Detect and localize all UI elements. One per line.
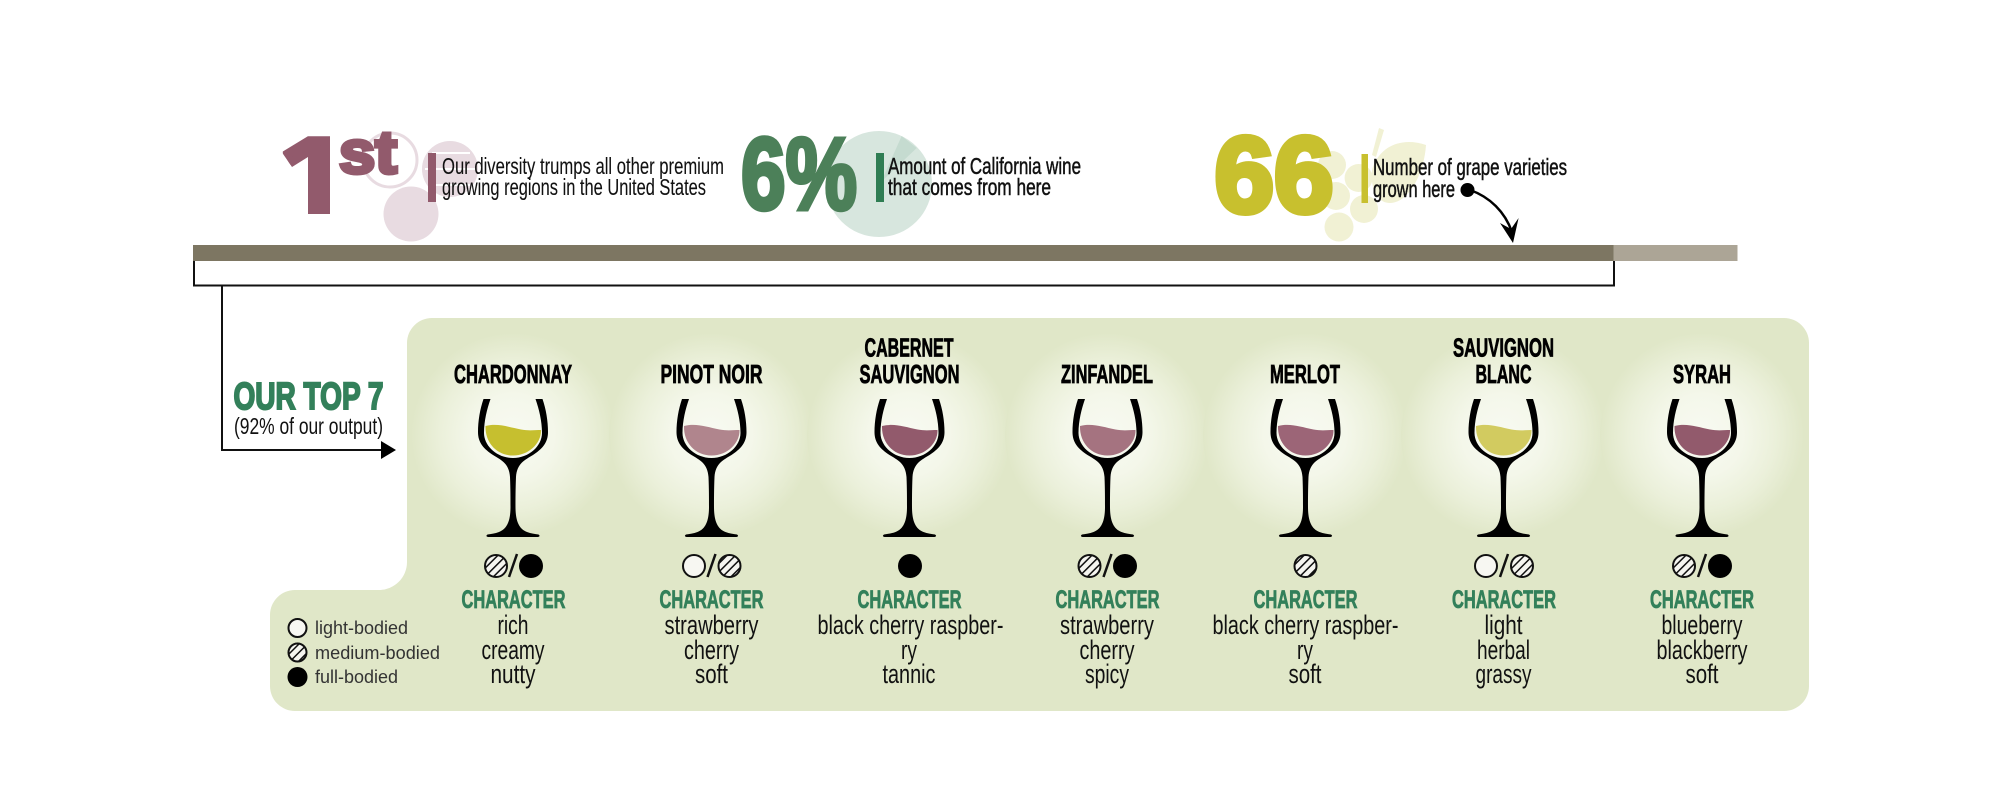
character list: CHARACTER (1650, 586, 1754, 614)
name (860, 332, 960, 389)
text: diversity: growing regions in the United States (442, 174, 706, 200)
character list: blueberry (1662, 610, 1743, 640)
text: grape varieties: Number of grape varieties (1373, 154, 1567, 180)
stat: 6% of California wine (741, 117, 1081, 237)
character list: blackberry (1656, 635, 1748, 665)
character list: black cherry raspber- (1212, 610, 1398, 640)
icon: pie chart (826, 131, 932, 237)
character list (1452, 586, 1556, 689)
name: MERLOT (1270, 359, 1340, 389)
stacked bar (193, 245, 1738, 261)
character list: nutty (490, 659, 536, 689)
character list (660, 586, 764, 689)
character list: CHARACTER (1452, 586, 1556, 614)
character list: tannic (882, 659, 936, 689)
character list: cherry (684, 635, 739, 665)
column: Chardonnay (454, 359, 572, 689)
name: SAUVIGNON (1453, 332, 1554, 362)
icon: wine glass (1270, 399, 1340, 537)
panel: top 7 varietals (270, 318, 1809, 711)
name: CABERNET (864, 332, 954, 362)
text: grape varieties: grown here (1373, 176, 1455, 202)
character list: CHARACTER (660, 586, 764, 614)
name: CHARDONNAY (454, 359, 572, 389)
body icons (1475, 554, 1533, 577)
column: Syrah (1650, 359, 1754, 689)
accent bar (1362, 154, 1368, 203)
name (1453, 332, 1554, 389)
character list: grassy (1476, 659, 1532, 689)
character list: CHARACTER (1056, 586, 1160, 614)
accent bar (428, 153, 436, 202)
heading: our top 7: (92% of our output) (234, 413, 383, 439)
character list (1650, 586, 1754, 689)
column: Cabernet Sauvignon (818, 332, 1004, 689)
column: Sauvignon Blanc (1452, 332, 1556, 689)
icon: grape cluster (1318, 128, 1426, 242)
name: ZINFANDEL (1061, 359, 1153, 389)
body icons (1673, 554, 1732, 578)
name: BLANC (1476, 359, 1532, 389)
text: grape varieties (1373, 154, 1567, 202)
character list (1212, 586, 1398, 689)
character list (462, 586, 566, 689)
character list: rich (498, 610, 528, 640)
body icon (898, 554, 922, 578)
character list: CHARACTER (462, 586, 566, 614)
number: 66: 66 (1214, 114, 1334, 235)
icon: wine glass (1667, 399, 1737, 537)
arrow: to bar (1460, 183, 1519, 243)
character list: CHARACTER (858, 586, 962, 614)
bracket and arrow to top 7 (194, 261, 1614, 459)
icon: wine glass (478, 399, 548, 537)
icon: wine glass (1468, 399, 1538, 537)
character list (1056, 586, 1160, 689)
body icons (683, 554, 740, 577)
heading: our top 7: OUR TOP 7 (234, 376, 384, 418)
text: diversity (442, 153, 724, 200)
character list: soft (695, 659, 728, 689)
character list: spicy (1085, 659, 1129, 689)
character list: strawberry (1060, 610, 1154, 640)
icon: pale circles (363, 133, 478, 242)
character list: creamy (482, 635, 545, 665)
character list (818, 586, 1004, 689)
column: Zinfandel (1056, 359, 1160, 689)
accent bar (876, 153, 884, 202)
name: SAUVIGNON (860, 359, 960, 389)
number: 1st: 1 (279, 116, 349, 248)
heading: our top 7 (234, 376, 384, 439)
legend: full-bodied (315, 667, 398, 687)
text: California: that comes from here (888, 174, 1051, 200)
name: PINOT NOIR (660, 359, 763, 389)
icon: wine glass (874, 399, 944, 537)
number: 1st: st (339, 119, 397, 186)
character list: soft (1686, 659, 1719, 689)
body icon (1294, 555, 1316, 577)
number: 1st (282, 132, 398, 214)
character list: herbal (1477, 635, 1530, 665)
column: Merlot (1212, 359, 1398, 689)
text: diversity: Our diversity trumps all other premium (442, 153, 724, 179)
character list: ry (1297, 635, 1313, 665)
character list: cherry (1080, 635, 1135, 665)
character list: light (1484, 610, 1523, 640)
stat: 1st growing region (282, 132, 723, 242)
column: Pinot Noir (660, 359, 764, 689)
legend: medium-bodied (315, 643, 440, 663)
body icons (485, 554, 543, 578)
icon: wine glass (676, 399, 746, 537)
body icons (1078, 554, 1137, 578)
text: California: Amount of California wine (888, 153, 1081, 179)
character list: CHARACTER (1254, 586, 1358, 614)
legend: light-bodied (315, 618, 408, 638)
glows behind glasses (411, 333, 1804, 537)
legend (288, 618, 440, 687)
name: SYRAH (1673, 359, 1731, 389)
character list: strawberry (664, 610, 759, 640)
icon: wine glass (1072, 399, 1142, 537)
stat: 66 grape varieties (1214, 114, 1567, 243)
number: 6%: 6% (741, 117, 857, 231)
text: California (888, 153, 1081, 200)
character list: soft (1288, 659, 1322, 689)
character list: ry (901, 635, 917, 665)
character list: black cherry raspber- (818, 610, 1004, 640)
